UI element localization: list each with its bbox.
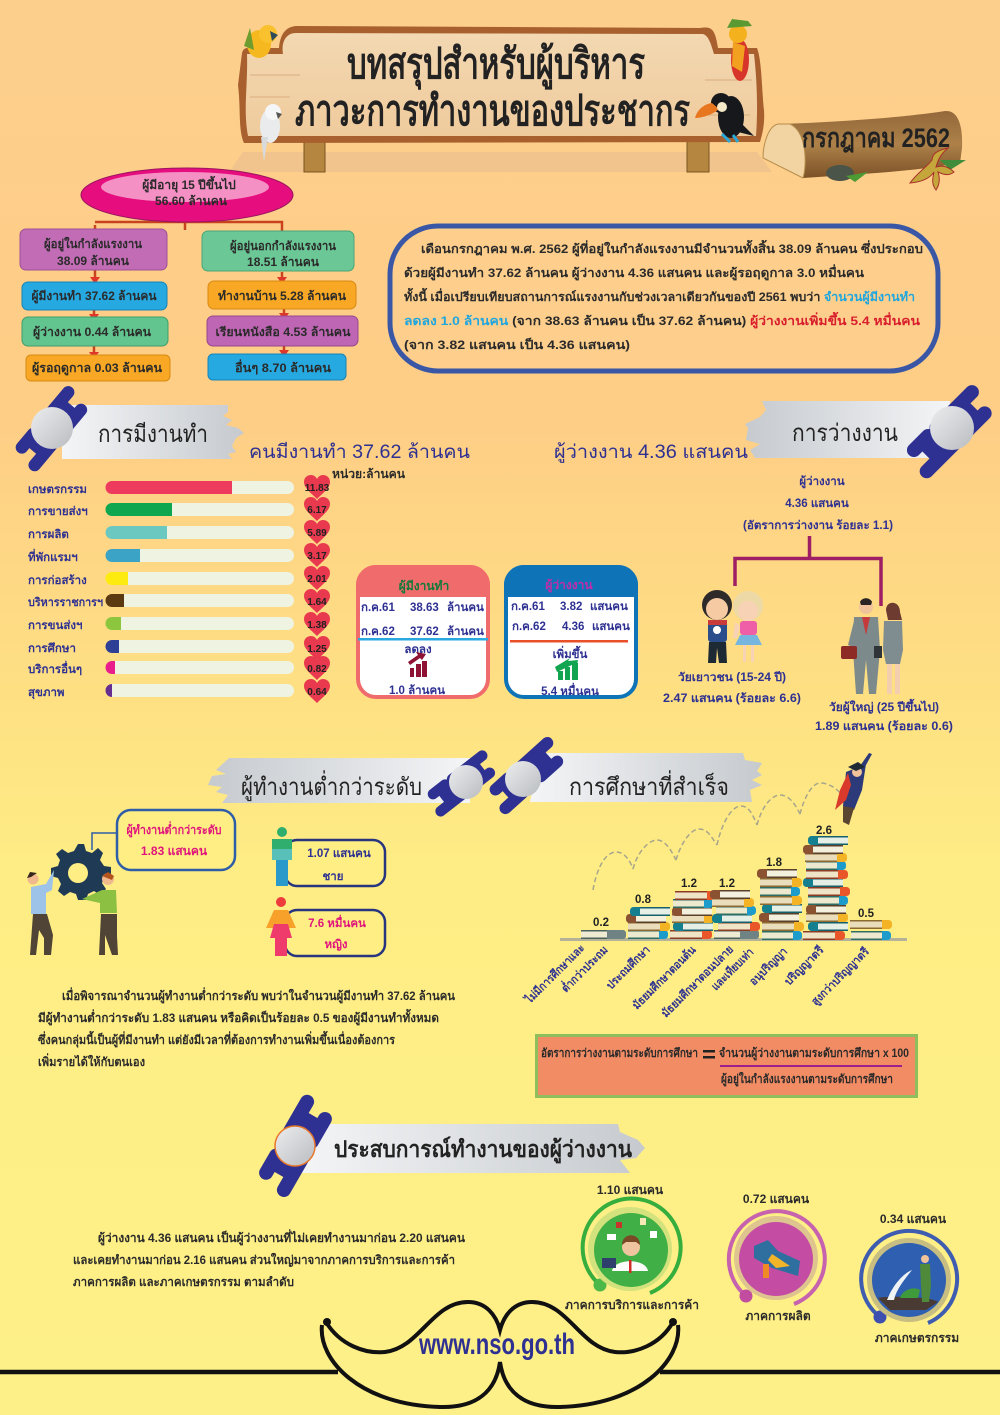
bar chart: employment by sector: การขายส่งฯ	[28, 505, 88, 518]
date log	[763, 111, 966, 190]
box: housework: ทำงานบ้าน 5.28 ล้านคน	[218, 289, 347, 303]
box: employed	[22, 282, 167, 310]
panel: unemployment breakdown: 1.89 แสนคน (ร้อยละ 0.6)	[815, 720, 953, 733]
icon: rising bars	[555, 658, 578, 680]
bar chart: employment by sector: 11.83	[305, 483, 330, 494]
chart labels: education levels: มัธยมศึกษาตอนต้น	[630, 943, 699, 1012]
text block: work experience: และเคยทำงานมาก่อน 2.16 แสนคน ส่วนใหญ่มาจากภาคการบริการและการค้า	[73, 1252, 455, 1267]
chart: book stacks by education	[560, 783, 907, 941]
icon: yellow parrot	[244, 25, 278, 58]
chart labels: education levels: ไม่มีการศึกษาและ	[521, 941, 587, 1007]
icon group: services and trade: 1.10 แสนคน	[597, 1183, 664, 1197]
icon: male figure with box	[272, 827, 385, 886]
box: others	[208, 354, 346, 380]
panel: unemployment breakdown: (อัตราการว่างงาน ร้อยละ 1.1)	[743, 519, 893, 532]
icon: female figure with box	[266, 897, 385, 956]
moustache	[322, 1302, 678, 1407]
panel: summary text: ด้วยผู้มีงานทำ 37.62 ล้านคน ผู้ว่างงาน 4.36 แสนคน และผู้รอฤดูกาล 3.0 หมื่นคน	[404, 264, 865, 281]
text block: underemployment note	[38, 987, 456, 1069]
banner: work experience	[254, 1092, 645, 1200]
bar chart: employment by sector: บริการอื่นๆ	[28, 660, 82, 676]
text block: work experience: ภาคการผลิต และภาคเกษตรกรรม ตามลำดับ	[73, 1275, 294, 1289]
icon: falling bars	[408, 652, 427, 677]
card: employed comparison: 1.0 ล้านคน	[389, 684, 445, 697]
box: students: เรียนหนังสือ 4.53 ล้านคน	[216, 325, 351, 339]
box: in labour force	[20, 229, 167, 270]
box: outside labour force: 18.51 ล้านคน	[247, 255, 320, 269]
card: employed comparison: ก.ค.61	[361, 602, 395, 614]
banner: unemployment: การว่างงาน	[792, 420, 898, 447]
population ellipse	[81, 168, 293, 222]
panel: unemployment rate formula	[536, 1036, 916, 1096]
bar chart: employment by sector: 6.17	[307, 505, 327, 516]
date text: กรกฎาคม 2562	[802, 123, 950, 153]
panel: unemployment rate formula: ผู้อยู่ในกำลังแรงงานตามระดับการศึกษา	[721, 1071, 893, 1087]
box: seasonal	[26, 355, 170, 381]
bar chart: employment by sector: สุขภาพ	[28, 687, 64, 700]
banner: employment	[10, 384, 244, 474]
bar chart: employment by sector: การศึกษา	[28, 642, 76, 655]
icon: white cockatoo	[260, 104, 282, 162]
panel: summary text: ทั้งนี้ เมื่อเปรียบเทียบสถานการณ์แรงงานกับช่วงเวลาเดียวกันของปี 2561 พบว่า จำนวนผู้มีงานทำ	[404, 287, 915, 305]
panel: summary text: ลดลง 1.0 ล้านคน (จาก 38.63 ล้านคน เป็น 37.62 ล้านคน) ผู้ว่างงานเพิ่มขึ้น 5.4 หมื่นคน	[404, 311, 921, 329]
bar chart: employment by sector: การผลิต	[28, 528, 69, 541]
card: unemployed comparison: 3.82	[560, 601, 582, 613]
banner: underemployed	[208, 748, 501, 819]
icon: female figure with box: หญิง	[324, 938, 348, 951]
card: employed comparison: ล้านคน	[447, 625, 484, 638]
box: unemployed: ผู้ว่างงาน 0.44 ล้านคน	[33, 325, 152, 340]
icon: female figure with box: 7.6 หมื่นคน	[308, 914, 366, 930]
text: youth: วัยเยาวชน (15-24 ปี)	[678, 671, 786, 684]
callout: underemployed count	[92, 810, 235, 870]
icon group: agriculture	[861, 1212, 959, 1345]
box: students	[207, 316, 358, 346]
card: employed comparison: ก.ค.62	[361, 626, 395, 638]
callout: underemployed count: 1.83 แสนคน	[141, 844, 208, 858]
text block: underemployment note: มีผู้ทำงานต่ำกว่าระดับ 1.83 แสนคน หรือคิดเป็นร้อยละ 0.5 ของผู้มีงานทำทั้งหมด	[38, 1008, 439, 1026]
chart: book stacks by education: 1.8	[766, 857, 783, 869]
panel: population tree	[20, 168, 358, 381]
card: unemployed comparison: ผู้ว่างงาน	[545, 578, 593, 593]
bar chart: employment by sector: การขนส่งฯ	[28, 619, 82, 632]
icon group: agriculture: ภาคเกษตรกรรม	[875, 1331, 959, 1345]
chart labels: education levels: ปริญญาตรี	[782, 943, 827, 988]
unit note: หน่วย:ล้านคน	[332, 467, 406, 481]
panel: unemployment rate formula: อัตราการว่างงานตามระดับการศึกษา	[541, 1046, 698, 1060]
callout: underemployed count: ผู้ทำงานต่ำกว่าระดับ	[126, 821, 222, 838]
card: employed comparison: ลดลง	[404, 644, 432, 656]
chart labels: education levels: และเทียบเท่า	[709, 946, 756, 993]
card: unemployed comparison: 4.36	[562, 621, 584, 633]
icon: flying graduate	[835, 753, 872, 825]
text block: underemployment note: เพิ่มรายได้ให้กับตนเอง	[38, 1053, 145, 1069]
text block: work experience: ผู้ว่างงาน 4.36 แสนคน เป็นผู้ว่างงานที่ไม่เคยทำงานมาก่อน 2.20 แสนคน	[98, 1229, 466, 1246]
chart: book stacks by education: 0.8	[635, 894, 652, 906]
card: employed comparison: ผู้มีงานทำ	[399, 579, 449, 594]
chart labels: education levels: สูงกว่าปริญญาตรี	[809, 945, 873, 1009]
title sign	[229, 19, 772, 172]
panel: unemployment breakdown: 4.36 แสนคน	[785, 498, 849, 510]
card: employed comparison: 37.62	[410, 626, 439, 638]
icon group: manufacturing	[729, 1192, 825, 1323]
card: unemployed comparison	[506, 567, 636, 698]
icon: boy	[702, 590, 732, 663]
card: unemployed comparison: 5.4 หมื่นคน	[541, 682, 599, 698]
bar chart: employment by sector: 1.64	[307, 597, 327, 608]
banner: unemployment	[745, 382, 999, 481]
subheading: employed: คนมีงานทำ 37.62 ล้านคน	[249, 441, 470, 463]
panel: unemployment breakdown: 2.47 แสนคน (ร้อยละ 6.6)	[663, 692, 801, 705]
icon group: agriculture: 0.34 แสนคน	[880, 1212, 947, 1226]
equals sign	[703, 1050, 715, 1058]
box: others: อื่นๆ 8.70 ล้านคน	[235, 359, 332, 375]
bar chart: employment by sector	[28, 475, 330, 703]
chart: book stacks by education: 1.2	[681, 878, 697, 890]
card: employed comparison: ล้านคน	[447, 601, 484, 614]
chart labels: education levels	[521, 941, 873, 1020]
box: unemployed	[22, 317, 168, 346]
banner: employment: การมีงานทำ	[98, 421, 208, 448]
connectors	[94, 205, 284, 356]
chart: book stacks by education: 0.5	[858, 908, 875, 920]
box: in labour force: 38.09 ล้านคน	[57, 254, 130, 268]
panel: unemployment rate formula: จำนวนผู้ว่างงานตามระดับการศึกษา x 100	[719, 1046, 909, 1061]
chart labels: education levels: มัธยมศึกษาตอนปลาย	[659, 943, 736, 1020]
chart labels: education levels: อนุปริญญา	[747, 945, 791, 989]
bar chart: employment by sector: 3.17	[307, 551, 327, 562]
panel: summary text	[390, 226, 938, 371]
box: employed: ผู้มีงานทำ 37.62 ล้านคน	[32, 289, 157, 304]
box: outside labour force: ผู้อยู่นอกกำลังแรงงาน	[230, 239, 337, 254]
box: seasonal: ผู้รอฤดูกาล 0.03 ล้านคน	[32, 361, 163, 376]
icon: businesswoman	[883, 603, 903, 694]
panel: summary text: เดือนกรกฎาคม พ.ศ. 2562 ผู้ที่อยู่ในกำลังแรงงานมีจำนวนทั้งสิ้น 38.09 ล้านคน ซึ่งประกอบ	[421, 239, 923, 257]
population ellipse: ผู้มีอายุ 15 ปีขึ้นไป	[142, 175, 236, 193]
bar chart: employment by sector: 0.82	[307, 664, 327, 675]
icon: red parrot	[727, 19, 752, 81]
bar chart: employment by sector: การก่อสร้าง	[28, 574, 87, 587]
icon group: services and trade	[565, 1183, 699, 1312]
bar chart: employment by sector: ที่พักแรมฯ	[28, 548, 78, 564]
text block: underemployment note: ซึ่งคนกลุ่มนี้เป็นผู้ที่มีงานทำ แต่ยังมีเวลาที่ต้องการทำงานเพิ่มขึ้นเนื่องต้องการ	[38, 1030, 395, 1048]
card: unemployed comparison: แสนคน	[592, 621, 630, 633]
box: in labour force: ผู้อยู่ในกำลังแรงงาน	[44, 236, 143, 252]
footer line	[0, 1370, 1000, 1374]
bar chart: employment by sector: 0.64	[307, 687, 327, 698]
bar chart: employment by sector: 1.38	[307, 620, 327, 631]
icon: male figure with box: ชาย	[322, 871, 344, 883]
bar chart: employment by sector: 5.89	[307, 528, 327, 539]
card: unemployed comparison: เพิ่มขึ้น	[553, 645, 588, 661]
panel: unemployment breakdown	[663, 475, 953, 733]
bar chart: employment by sector: บริหารราชการฯ	[28, 596, 103, 609]
chart: book stacks by education: 2.6	[816, 825, 832, 837]
banner: education: การศึกษาที่สำเร็จ	[569, 770, 729, 801]
chart labels: education levels: ต่ำกว่าประถม	[557, 941, 611, 995]
panel: summary text: (จาก 3.82 แสนคน เป็น 4.36 แสนคน)	[404, 337, 630, 352]
icon: male figure with box: 1.07 แสนคน	[307, 848, 371, 860]
website url: www.nso.go.th	[418, 1328, 575, 1361]
icon: girl	[733, 591, 763, 662]
icon: leaves and rock	[826, 148, 966, 190]
card: unemployed comparison: ก.ค.61	[511, 601, 545, 613]
chart: book stacks by education: 1.2	[719, 878, 735, 890]
population ellipse: 56.60 ล้านคน	[155, 194, 228, 208]
heading: title line 2: ภาวะการทำงานของประชากร	[295, 87, 690, 134]
icon: toucan	[695, 93, 754, 142]
icon: businessman	[841, 598, 882, 694]
banner: underemployed: ผู้ทำงานต่ำกว่าระดับ	[241, 770, 422, 802]
box: housework	[208, 281, 356, 309]
heading: title line 1: บทสรุปสำหรับผู้บริหาร	[347, 40, 645, 90]
card: unemployed comparison: ก.ค.62	[512, 621, 546, 633]
banner: education	[483, 735, 762, 817]
chart: book stacks by education: 0.2	[593, 917, 609, 929]
text: adults: วัยผู้ใหญ่ (25 ปีขึ้นไป)	[829, 698, 939, 715]
bar chart: employment by sector: 1.25	[307, 644, 327, 655]
card: unemployed comparison: แสนคน	[590, 601, 628, 613]
box: outside labour force	[202, 231, 354, 271]
bar chart: employment by sector: 2.01	[307, 574, 327, 585]
banner: work experience: ประสบการณ์ทำงานของผู้ว่างงาน	[334, 1136, 632, 1164]
panel: unemployment breakdown: ผู้ว่างงาน	[799, 475, 845, 489]
icon group: services and trade: ภาคการบริการและการค้า	[565, 1298, 699, 1312]
card: employed comparison	[358, 567, 488, 697]
subheading: unemployed: ผู้ว่างงาน 4.36 แสนคน	[554, 442, 748, 463]
text block: work experience	[73, 1229, 466, 1289]
bar chart: employment by sector: เกษตรกรรม	[28, 484, 87, 496]
icon group: manufacturing: ภาคการผลิต	[745, 1309, 811, 1323]
card: employed comparison: 38.63	[410, 602, 439, 614]
chart labels: education levels: ประถมศึกษา	[604, 943, 653, 992]
icon: gear and two workers	[27, 844, 118, 955]
icon group: manufacturing: 0.72 แสนคน	[743, 1192, 810, 1206]
text block: underemployment note: เมื่อพิจารณาจำนวนผู้ทำงานต่ำกว่าระดับ พบว่าในจำนวนผู้มีงานทำ 37.62 ล้านคน	[62, 987, 456, 1004]
